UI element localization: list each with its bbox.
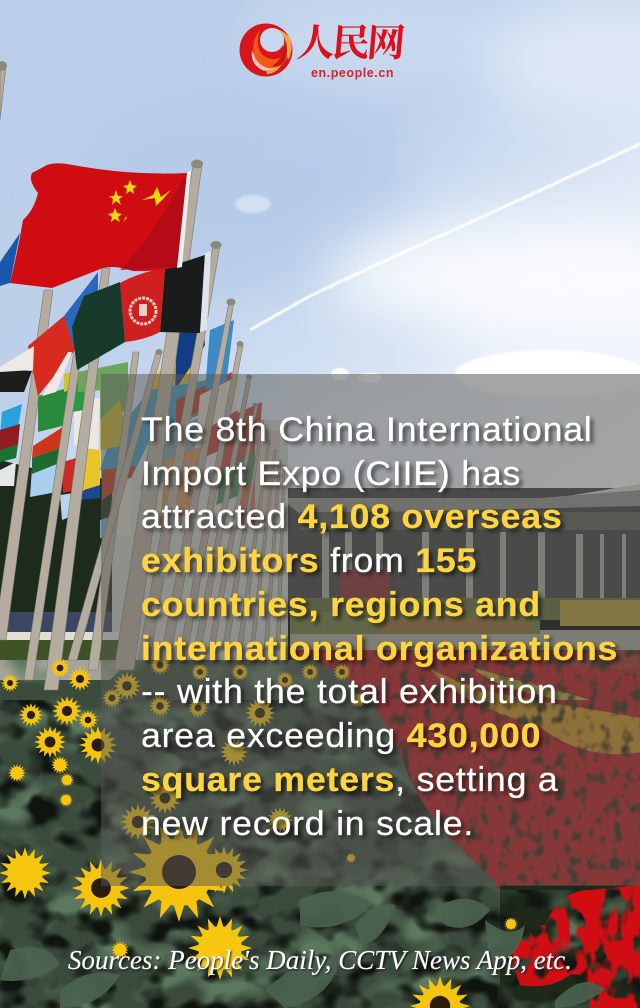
low clouds [455,350,640,398]
flag: blue white red behind [0,272,98,396]
logo: People's Daily Online [240,24,292,76]
main text block: Import Expo (CIIE) has [141,455,521,493]
flag: blue left [0,233,20,286]
garden base [290,650,640,890]
mist behind poles [100,420,288,660]
logo Chinese wordmark: 人民网 [295,12,405,67]
sunflowers [0,655,518,1008]
building [280,484,640,650]
source note: Sources: People's Daily, CCTV News App, etc. [68,945,572,975]
leaves field on left [0,660,640,1008]
main text block: area exceeding 430,000 [141,717,541,755]
main text block: exhibitors from 155 [141,542,477,580]
main text block: square meters, setting a [141,761,559,799]
lawn and lake behind poles [0,612,130,680]
main text block: The 8th China International [141,411,593,449]
flag: China [10,163,191,288]
main text block: countries, regions and [141,586,541,624]
main text block: attracted 4,108 overseas [141,498,563,536]
contrail [250,144,640,330]
sky [0,0,640,520]
main text block: new record in scale. [141,805,474,843]
logo URL: en.people.cn [311,66,394,80]
distant small flags [0,302,280,538]
flag: Afghanistan [72,251,211,370]
pole caps [0,61,258,407]
translucent text panel [101,374,640,886]
logo icon [240,24,292,76]
main text block: -- with the total exhibition [141,673,558,711]
main text block: international organizations [141,630,618,668]
flag poles [0,62,285,690]
large foreground leaves [0,891,605,1008]
red salvia flowers, lower right [500,885,640,1008]
trees on left [0,460,112,615]
